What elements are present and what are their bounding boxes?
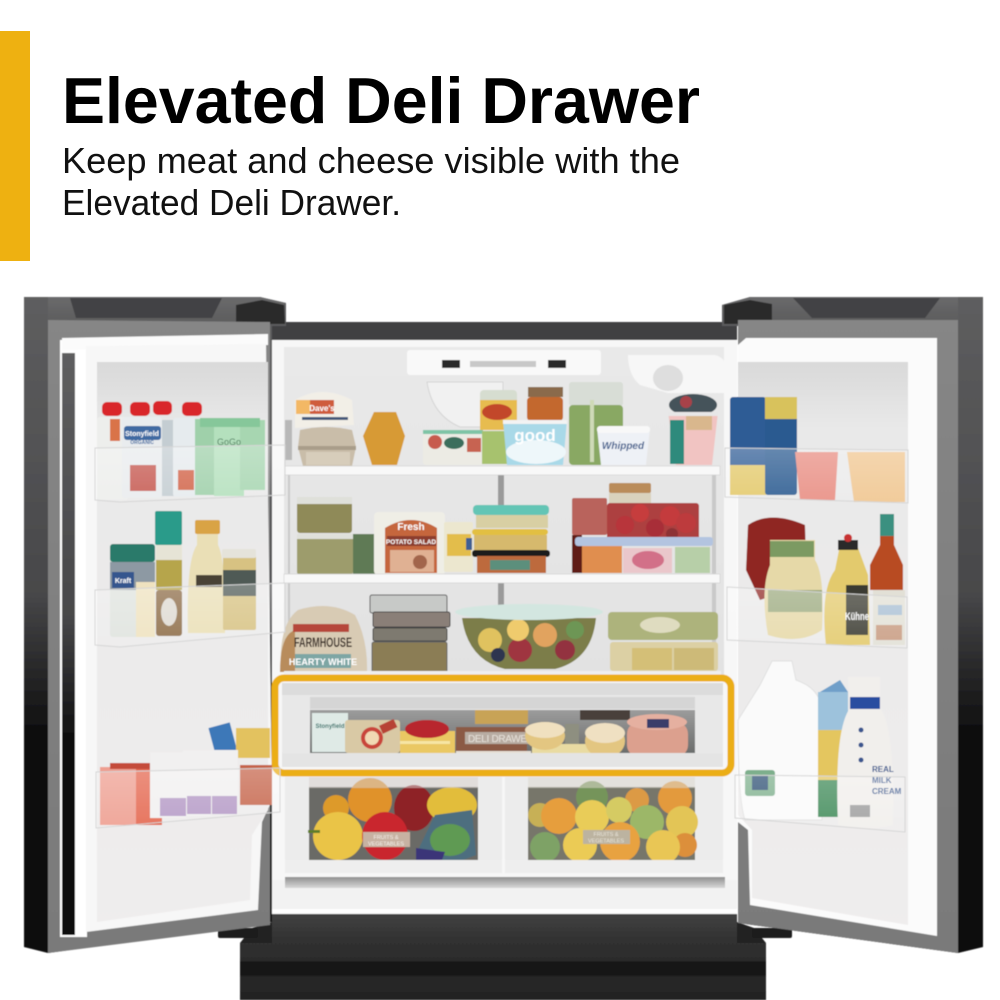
pasta salad containers bbox=[297, 497, 377, 575]
potato salad: Fresh bbox=[397, 522, 425, 533]
kraft jar bbox=[110, 544, 155, 637]
right door bin 2 bbox=[727, 587, 907, 648]
small tub bbox=[444, 522, 473, 572]
deli package bbox=[456, 710, 537, 758]
jam jar bbox=[527, 387, 563, 421]
shelf rails bbox=[285, 420, 716, 675]
bread bag bbox=[295, 392, 354, 428]
parfait cup bbox=[668, 394, 718, 465]
whipped tub bbox=[597, 426, 650, 465]
right door bin 1 food bbox=[730, 397, 905, 502]
left door bin 2 bbox=[95, 583, 285, 647]
green pouches: GoGo bbox=[217, 437, 241, 447]
shelf 2 bbox=[284, 574, 720, 583]
controls and light bbox=[407, 350, 727, 427]
meats and cheese pack bbox=[345, 719, 400, 753]
accent bar bbox=[0, 31, 30, 261]
yogurt pouches: ORGANIC bbox=[130, 440, 154, 446]
yogurt pouches: Stonyfield bbox=[125, 431, 159, 438]
lower shelf food bbox=[280, 595, 718, 672]
creamer bottle: CREAM bbox=[872, 787, 902, 796]
creamer bottle: REAL bbox=[872, 765, 894, 774]
fruits label bbox=[363, 832, 410, 848]
left door bin 1 bbox=[95, 445, 285, 502]
top shelf food bbox=[295, 382, 718, 466]
farmhouse bread bbox=[280, 606, 367, 672]
pickled jar bbox=[569, 382, 623, 465]
kraft jar: Kraft bbox=[115, 578, 132, 585]
deli package: DELI DRAWER bbox=[468, 734, 534, 745]
shaker bottle bbox=[155, 511, 182, 636]
right door bin 3 food bbox=[738, 661, 902, 828]
green lid tub bbox=[423, 430, 483, 465]
right door bin 2 food: Kühne bbox=[845, 611, 869, 623]
right door bbox=[722, 297, 983, 953]
creamer bottle bbox=[837, 677, 902, 828]
creamer carton bbox=[818, 680, 848, 817]
citrus label: VEGETABLES bbox=[588, 838, 624, 844]
subtitle text: Keep meat and cheese visible with the bbox=[62, 140, 680, 181]
right door bin 3 bbox=[735, 775, 905, 832]
fruit bowl bbox=[455, 604, 603, 669]
citrus label: FRUITS & bbox=[593, 832, 619, 838]
egg carton bbox=[298, 427, 356, 466]
yogurt bbox=[312, 713, 348, 752]
yogurt pouches bbox=[97, 401, 202, 500]
right door bin 2 food bbox=[746, 514, 905, 645]
left door bin 2 food bbox=[110, 511, 256, 637]
refrigerator bbox=[24, 297, 983, 1000]
left door bin 1 food bbox=[97, 401, 265, 500]
freezer drawer bbox=[218, 905, 792, 1000]
potato salad: POTATO SALAD bbox=[386, 539, 436, 546]
vegetables bbox=[308, 778, 477, 867]
left door bin 3 food bbox=[100, 722, 272, 825]
good tub: good bbox=[514, 426, 556, 445]
creamer bottle: MILK bbox=[872, 776, 892, 785]
left door bbox=[24, 297, 286, 953]
milk jug bbox=[738, 661, 822, 820]
deli drawer bbox=[282, 683, 723, 767]
muffin container bbox=[363, 412, 405, 465]
citrus label bbox=[583, 830, 630, 844]
strawberries bbox=[607, 503, 699, 541]
fridge cabinet bbox=[272, 322, 737, 914]
stacked tubs bbox=[472, 505, 550, 573]
title: Elevated Deli Drawer bbox=[62, 64, 700, 137]
highlight box bbox=[275, 678, 731, 773]
right produce drawer bbox=[505, 777, 723, 873]
farmhouse bread: HEARTY WHITE bbox=[289, 657, 357, 667]
lower shelf floor bbox=[284, 671, 721, 677]
yogurt: Stonyfield bbox=[315, 724, 345, 730]
meal prep stack bbox=[370, 595, 450, 672]
tortellini containers bbox=[608, 612, 718, 671]
farmhouse bread: FARMHOUSE bbox=[294, 634, 352, 650]
left produce drawer bbox=[285, 777, 502, 873]
round cheeses bbox=[525, 710, 630, 760]
fruits label: VEGETABLES bbox=[368, 842, 404, 848]
whipped tub: Whipped bbox=[602, 441, 645, 452]
bread bag: Dave's bbox=[309, 404, 335, 413]
produce containers bbox=[575, 537, 713, 573]
good tub bbox=[503, 420, 567, 465]
subtitle text: Elevated Deli Drawer. bbox=[62, 182, 401, 223]
right door bin 1 bbox=[725, 448, 908, 503]
shelf 1 bbox=[285, 466, 720, 475]
middle shelf food bbox=[297, 483, 713, 575]
jars right bbox=[572, 483, 651, 573]
mustard jar bbox=[222, 549, 256, 630]
green pouches bbox=[195, 418, 265, 496]
dressing bottle bbox=[188, 520, 225, 633]
citrus bbox=[528, 781, 698, 864]
fruits label: FRUITS & bbox=[373, 835, 399, 841]
potato salad bbox=[374, 512, 445, 575]
jar with label bbox=[480, 390, 517, 464]
sliced cheese bbox=[400, 720, 455, 753]
ham round bbox=[627, 714, 688, 757]
left door bin 3 bbox=[96, 768, 280, 828]
